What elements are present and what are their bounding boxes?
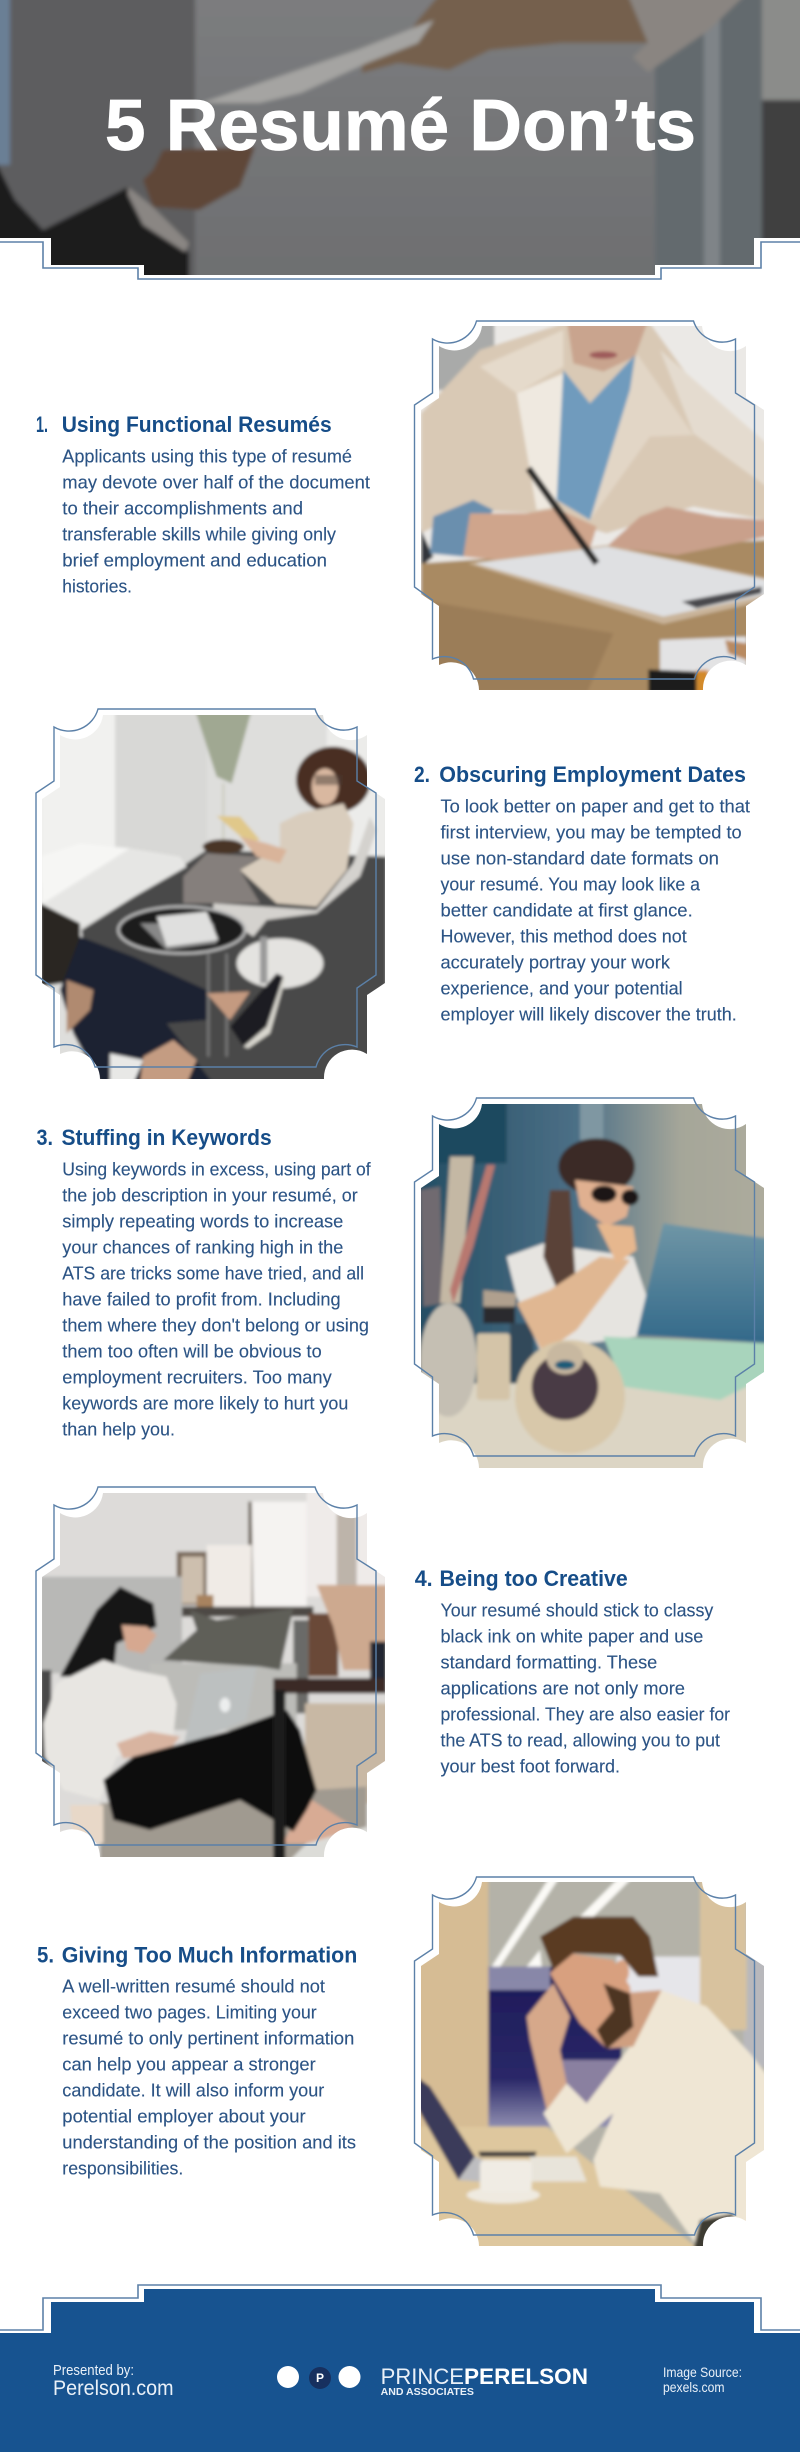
body 1 — [62, 446, 370, 596]
body 4: applications are not only more — [440, 1679, 685, 1699]
title: 5 Resumé Don’ts — [105, 86, 696, 166]
image source: Image Source: — [663, 2364, 742, 2380]
photo 1: woman writing on clipboard — [421, 326, 764, 690]
body 1: Applicants using this type of resumé — [62, 446, 352, 466]
photo 3 frame — [414, 1098, 754, 1456]
body 5 — [62, 1976, 356, 2178]
body 3: them too often will be obvious to — [62, 1341, 322, 1361]
body 3: the job description in your resumé, or — [62, 1185, 358, 1205]
body 3: them where they don't belong or using — [62, 1315, 369, 1335]
body 3: have failed to profit from. Including — [62, 1289, 341, 1309]
body 4 — [440, 1601, 730, 1777]
body 3 — [62, 1159, 372, 1439]
heading 5: Giving Too Much Information — [62, 1942, 357, 1967]
body 4: standard formatting. These — [440, 1653, 657, 1673]
heading 5: 5. — [37, 1942, 54, 1967]
body 2: However, this method does not — [440, 926, 687, 946]
body 5: A well-written resumé should not — [62, 1976, 325, 1996]
footer stepped outline — [0, 2285, 800, 2330]
body 2: your resumé. You may look like a — [440, 874, 701, 894]
body 2: better candidate at first glance. — [440, 900, 693, 920]
body 1: to their accomplishments and — [62, 498, 303, 518]
heading 1: 1. — [36, 412, 48, 437]
photo 4: woman on floor with laptop — [42, 1493, 385, 1857]
photo 2 frame — [36, 709, 376, 1067]
body 2: first interview, you may be tempted to — [440, 822, 742, 842]
footer panel — [0, 2289, 800, 2452]
body 4: Your resumé should stick to classy — [440, 1601, 713, 1621]
body 3: employment recruiters. Too many — [62, 1367, 332, 1387]
body 4: black ink on white paper and use — [440, 1627, 703, 1647]
presented by: Perelson.com — [53, 2377, 174, 2400]
header banner photo — [0, 0, 800, 290]
heading 2: 2. — [414, 762, 430, 787]
section 5 text — [37, 1942, 357, 2178]
heading 3: Stuffing in Keywords — [62, 1125, 272, 1150]
body 4: the ATS to read, allowing you to put — [440, 1731, 720, 1751]
photo 2: interview in armchair — [42, 715, 385, 1079]
photo 1 frame — [414, 321, 754, 679]
body 2: use non-standard date formats on — [440, 848, 719, 868]
heading 1: Using Functional Resumés — [62, 412, 332, 437]
image source: pexels.com — [663, 2379, 724, 2395]
body 4: professional. They are also easier for — [440, 1705, 730, 1725]
heading 2: Obscuring Employment Dates — [439, 762, 746, 787]
body 3: your chances of ranking high in the — [62, 1237, 343, 1257]
section 4 text — [415, 1566, 730, 1777]
photo 3: frowning woman at laptop — [421, 1104, 764, 1468]
logo circles — [277, 2366, 360, 2389]
body 5: candidate. It will also inform your — [62, 2080, 324, 2100]
section 2 text — [414, 762, 750, 1024]
photo 5 frame — [414, 1877, 754, 2235]
presented by — [53, 2363, 174, 2400]
heading 3: 3. — [36, 1125, 53, 1150]
body 3: than help you. — [62, 1419, 175, 1439]
body 1: brief employment and education — [62, 550, 327, 570]
body 2: employer will likely discover the truth. — [440, 1004, 737, 1024]
logo circles: P — [316, 2371, 324, 2385]
photo 4 frame — [36, 1487, 376, 1845]
heading 4: 4. — [415, 1566, 433, 1591]
heading 4: Being too Creative — [440, 1566, 628, 1591]
body 2: experience, and your potential — [440, 978, 683, 998]
body 2: To look better on paper and get to that — [440, 796, 750, 816]
section 3 text — [36, 1125, 372, 1439]
logo wordmark — [381, 2364, 588, 2398]
body 3: simply repeating words to increase — [62, 1211, 343, 1231]
body 5: exceed two pages. Limiting your — [62, 2002, 317, 2022]
body 5: potential employer about your — [62, 2106, 306, 2126]
body 5: responsibilities. — [62, 2158, 183, 2178]
body 4: your best foot forward. — [440, 1757, 620, 1777]
image source — [663, 2364, 742, 2395]
body 5: understanding of the position and its — [62, 2132, 356, 2152]
body 3: keywords are more likely to hurt you — [62, 1393, 348, 1413]
body 1: may devote over half of the document — [62, 472, 370, 492]
body 5: resumé to only pertinent information — [62, 2028, 354, 2048]
body 2 — [440, 796, 750, 1024]
body 1: histories. — [62, 576, 132, 596]
body 3: Using keywords in excess, using part of — [62, 1159, 372, 1179]
presented by: Presented by: — [53, 2363, 134, 2379]
body 1: transferable skills while giving only — [62, 524, 336, 544]
body 2: accurately portray your work — [440, 952, 671, 972]
logo wordmark: AND ASSOCIATES — [381, 2386, 474, 2398]
body 5: can help you appear a stronger — [62, 2054, 316, 2074]
logo wordmark: PERELSON — [464, 2364, 588, 2389]
header stepped outline — [0, 242, 800, 279]
logo wordmark: PRINCE — [381, 2364, 464, 2389]
logo: Prince Perelson and Associates — [277, 2364, 588, 2398]
body 3: ATS are tricks some have tried, and all — [62, 1263, 364, 1283]
photo 5: stressed man at laptop — [421, 1882, 764, 2246]
section 1 text — [36, 412, 370, 596]
